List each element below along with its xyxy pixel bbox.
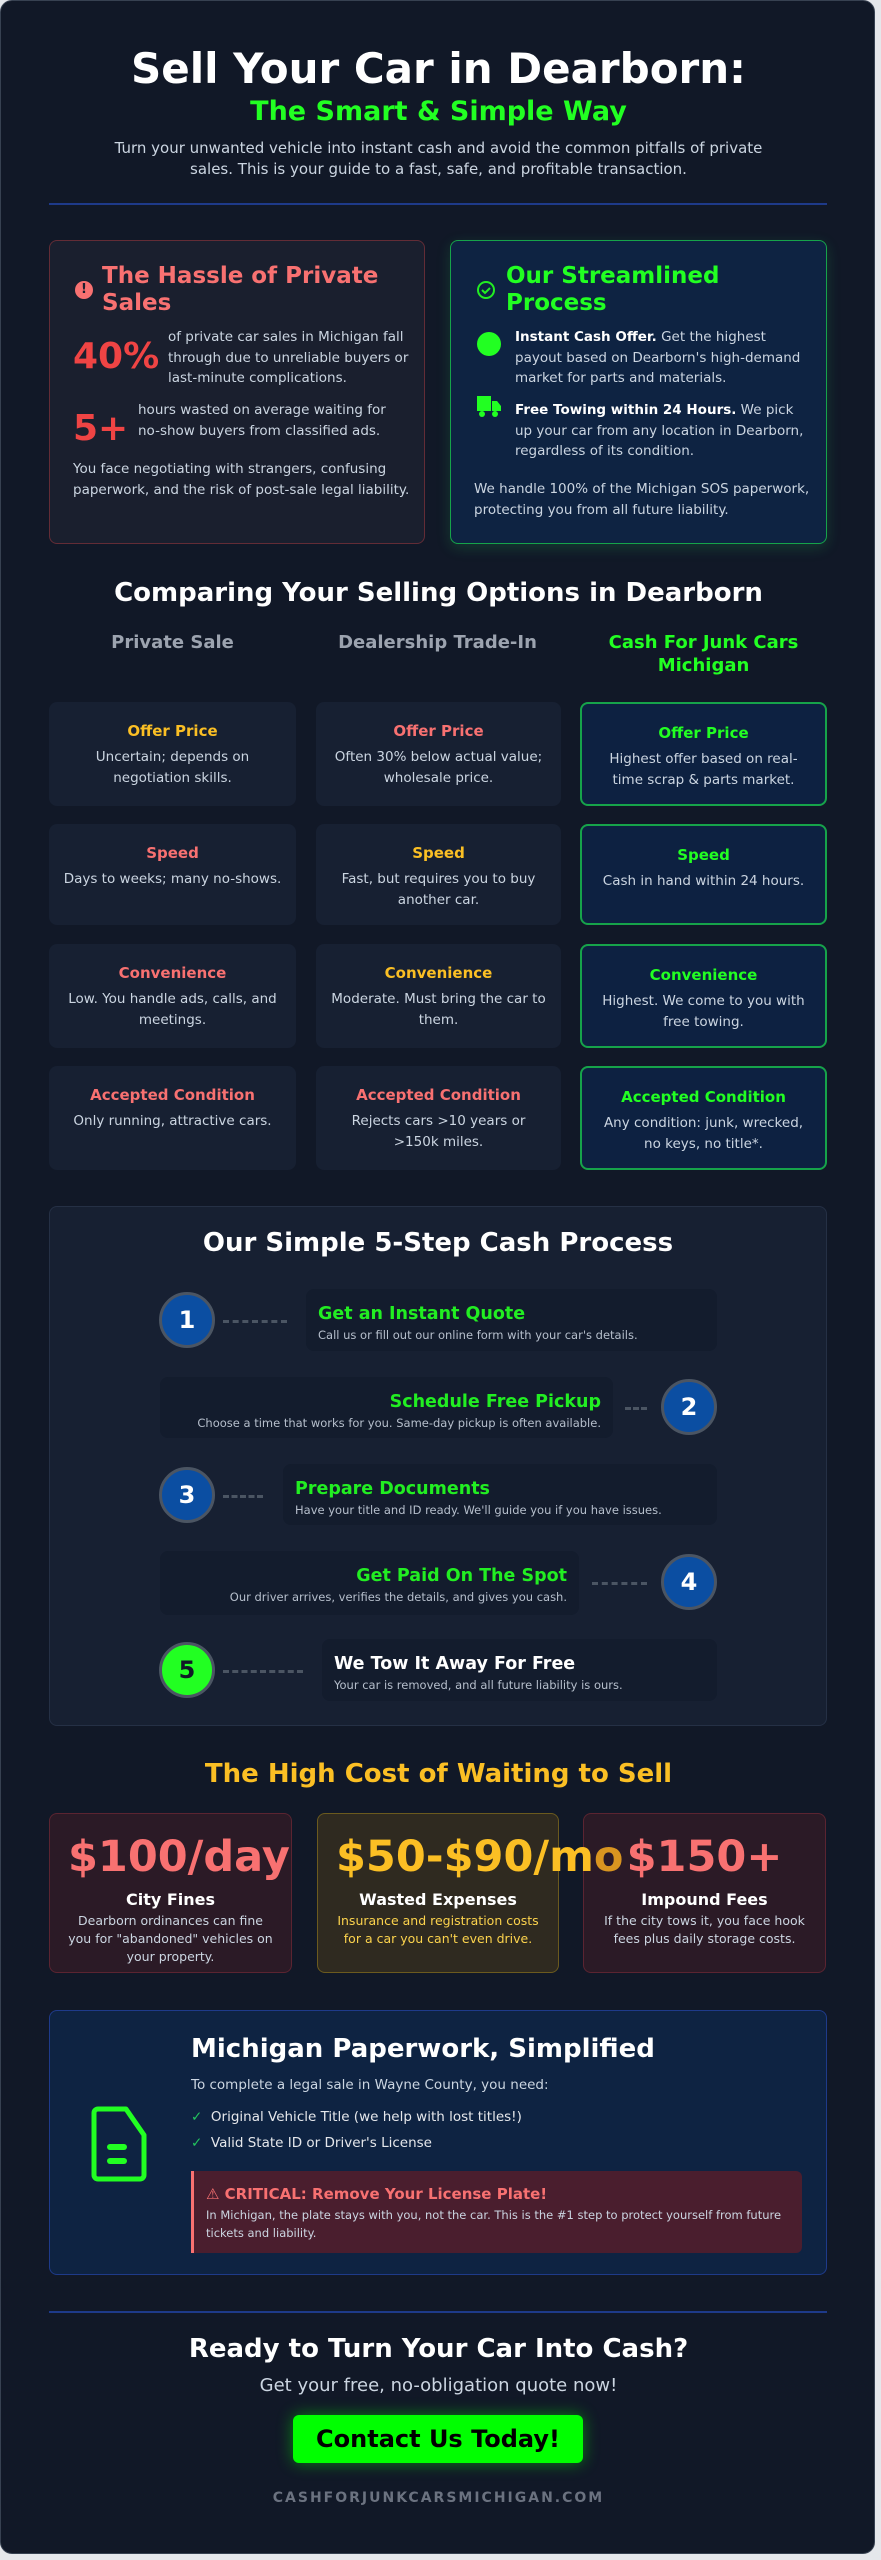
row: convenience: Convenience bbox=[650, 966, 757, 984]
row: speed: Speed bbox=[412, 844, 465, 862]
cost card: wasted expenses: Insurance and registration costs for a car you can't even drive. bbox=[337, 1913, 539, 1946]
step 4: Our driver arrives, verifies the details, and gives you cash. bbox=[230, 1590, 567, 1604]
row: accepted condition: Accepted Condition bbox=[621, 1088, 786, 1106]
step 1 bbox=[159, 1292, 638, 1348]
column header: dealership: Dealership Trade-In bbox=[338, 632, 537, 653]
checklist bbox=[191, 2109, 522, 2151]
callout: critical: In Michigan, the plate stays with you, not the car. This is the #1 step to protect yourself from future tickets and liability. bbox=[206, 2208, 781, 2240]
icon: check circle bbox=[477, 281, 495, 299]
row: accepted condition: Accepted Condition bbox=[90, 1086, 255, 1104]
subtitle: The Smart & Simple Way bbox=[250, 96, 627, 127]
stat: 40%: 40% bbox=[73, 336, 159, 377]
callout: critical: ⚠ CRITICAL: Remove Your License Plate! bbox=[206, 2185, 547, 2203]
step 3: Prepare Documents bbox=[295, 1479, 490, 1499]
column header: cash for junk cars: Cash For Junk Cars Michigan bbox=[609, 632, 798, 676]
step 5: Your car is removed, and all future liability is ours. bbox=[334, 1678, 623, 1692]
heading: paperwork: Michigan Paperwork, Simplified bbox=[191, 2034, 655, 2064]
subheading: Get your free, no-obligation quote now! bbox=[260, 2375, 617, 2396]
button: contact: Contact Us Today! bbox=[316, 2425, 560, 2453]
cost card: city fines: $100/day bbox=[68, 1832, 290, 1882]
step 1: 1 bbox=[179, 1306, 195, 1334]
cost card: impound fees: If the city tows it, you face hook fees plus daily storage costs. bbox=[604, 1913, 805, 1946]
row: offer price bbox=[49, 702, 827, 806]
row: speed: Days to weeks; many no-shows. bbox=[64, 871, 281, 887]
cost card: impound fees: Impound Fees bbox=[641, 1890, 768, 1909]
paragraph: You face negotiating with strangers, confusing paperwork, and the risk of post-sale legal liability. bbox=[73, 461, 409, 498]
paragraph: We handle 100% of the Michigan SOS paperwork, protecting you from all future liability. bbox=[474, 481, 809, 518]
cost card: city fines bbox=[49, 1813, 292, 1973]
cost card: city fines: Dearborn ordinances can fine you for "abandoned" vehicles on your property. bbox=[68, 1913, 273, 1964]
row: offer price: Highest offer based on real-time scrap & parts market. bbox=[609, 751, 798, 788]
row: accepted condition: Rejects cars >10 years or >150k miles. bbox=[352, 1113, 525, 1150]
cost card: city fines: City Fines bbox=[126, 1890, 215, 1909]
intro: To complete a legal sale in Wayne County, you need: bbox=[191, 2077, 549, 2093]
row: convenience bbox=[49, 944, 827, 1048]
row: convenience: Convenience bbox=[119, 964, 226, 982]
step 5 bbox=[159, 1642, 623, 1698]
icon: document bbox=[92, 2106, 146, 2182]
cost card: impound fees bbox=[583, 1813, 826, 1973]
panel: hassle of private sales bbox=[49, 240, 425, 544]
checklist: ✓ Original Vehicle Title (we help with lost titles!) bbox=[191, 2109, 522, 2125]
row: convenience: Highest. We come to you with free towing. bbox=[602, 993, 805, 1030]
intro text: Turn your unwanted vehicle into instant cash and avoid the common pitfalls of private sales. This is your guide to a fast, safe, and profitable transaction. bbox=[115, 139, 762, 178]
step 4: Get Paid On The Spot bbox=[356, 1566, 567, 1586]
step 5: We Tow It Away For Free bbox=[334, 1654, 575, 1674]
row: accepted condition bbox=[49, 1066, 827, 1170]
title: Sell Your Car in Dearborn: bbox=[131, 44, 746, 93]
callout: critical bbox=[191, 2171, 802, 2253]
heading: comparing: Comparing Your Selling Options in Dearborn bbox=[114, 578, 763, 608]
cost card: wasted expenses bbox=[317, 1813, 559, 1973]
row: speed: Cash in hand within 24 hours. bbox=[603, 873, 804, 889]
item: free towing: Free Towing within 24 Hours. We pick up your car from any location in Dearborn, regardless of its condition. bbox=[515, 402, 803, 459]
panel: streamlined process bbox=[450, 240, 827, 544]
panel: 5-step process bbox=[49, 1206, 827, 1726]
step 3: 3 bbox=[179, 1481, 195, 1509]
icon: truck bbox=[477, 396, 501, 417]
step 2: Choose a time that works for you. Same-day pickup is often available. bbox=[197, 1416, 601, 1430]
step 3 bbox=[159, 1467, 662, 1523]
row: convenience: Low. You handle ads, calls, and meetings. bbox=[68, 991, 277, 1028]
item: instant cash: Instant Cash Offer. Get the highest payout based on Dearborn's high-demand market for parts and materials. bbox=[515, 329, 800, 386]
step 4: 4 bbox=[681, 1568, 697, 1596]
heading: steps: Our Simple 5-Step Cash Process bbox=[203, 1228, 673, 1258]
checklist: ✓ Valid State ID or Driver's License bbox=[191, 2135, 432, 2151]
heading: streamlined: Our Streamlined Process bbox=[506, 263, 719, 316]
icon: cash bbox=[477, 332, 501, 356]
step 2: Schedule Free Pickup bbox=[390, 1392, 601, 1412]
footer url: CASHFORJUNKCARSMICHIGAN.COM bbox=[273, 2490, 604, 2506]
cost card: impound fees: $150+ bbox=[627, 1832, 782, 1882]
step 1: Get an Instant Quote bbox=[318, 1304, 525, 1324]
row: convenience: Moderate. Must bring the car to them. bbox=[331, 991, 546, 1028]
stat: 5+: 5+ bbox=[73, 408, 128, 449]
row: speed: Fast, but requires you to buy another car. bbox=[342, 871, 535, 908]
row: offer price: Offer Price bbox=[658, 724, 749, 742]
row: accepted condition: Any condition: junk, wrecked, no keys, no title*. bbox=[604, 1115, 803, 1152]
step 2: 2 bbox=[681, 1393, 697, 1421]
cost card: wasted expenses: $50-$90/mo bbox=[336, 1832, 623, 1882]
row: speed: Speed bbox=[677, 846, 730, 864]
heading: ready: Ready to Turn Your Car Into Cash? bbox=[189, 2334, 688, 2364]
cost card: wasted expenses: Wasted Expenses bbox=[359, 1890, 517, 1909]
row: offer price: Offer Price bbox=[393, 722, 484, 740]
row: accepted condition: Only running, attractive cars. bbox=[73, 1113, 272, 1129]
heading: hassle: The Hassle of Private Sales bbox=[102, 263, 378, 316]
stat text: of private car sales in Michigan fall through due to unreliable buyers or last-minute complications. bbox=[168, 329, 408, 386]
row: speed: Speed bbox=[146, 844, 199, 862]
step 2 bbox=[197, 1379, 717, 1435]
column header: private: Private Sale bbox=[111, 632, 234, 653]
button: contact bbox=[293, 2415, 583, 2463]
heading: high cost: The High Cost of Waiting to Sell bbox=[205, 1759, 672, 1789]
row: accepted condition: Accepted Condition bbox=[356, 1086, 521, 1104]
step 4 bbox=[230, 1554, 717, 1610]
icon: alert: ! bbox=[81, 282, 87, 297]
step 1: Call us or fill out our online form with your car's details. bbox=[318, 1328, 638, 1342]
icon: alert bbox=[75, 281, 93, 299]
step 3: Have your title and ID ready. We'll guide you if you have issues. bbox=[295, 1503, 662, 1517]
row: speed bbox=[49, 824, 827, 925]
row: offer price: Offer Price bbox=[127, 722, 218, 740]
row: convenience: Convenience bbox=[385, 964, 492, 982]
row: offer price: Often 30% below actual value; wholesale price. bbox=[335, 749, 542, 786]
panel: paperwork bbox=[49, 2010, 827, 2275]
stat text: hours wasted on average waiting for no-show buyers from classified ads. bbox=[138, 402, 386, 438]
step 5: 5 bbox=[179, 1656, 195, 1684]
row: offer price: Uncertain; depends on negotiation skills. bbox=[96, 749, 249, 786]
